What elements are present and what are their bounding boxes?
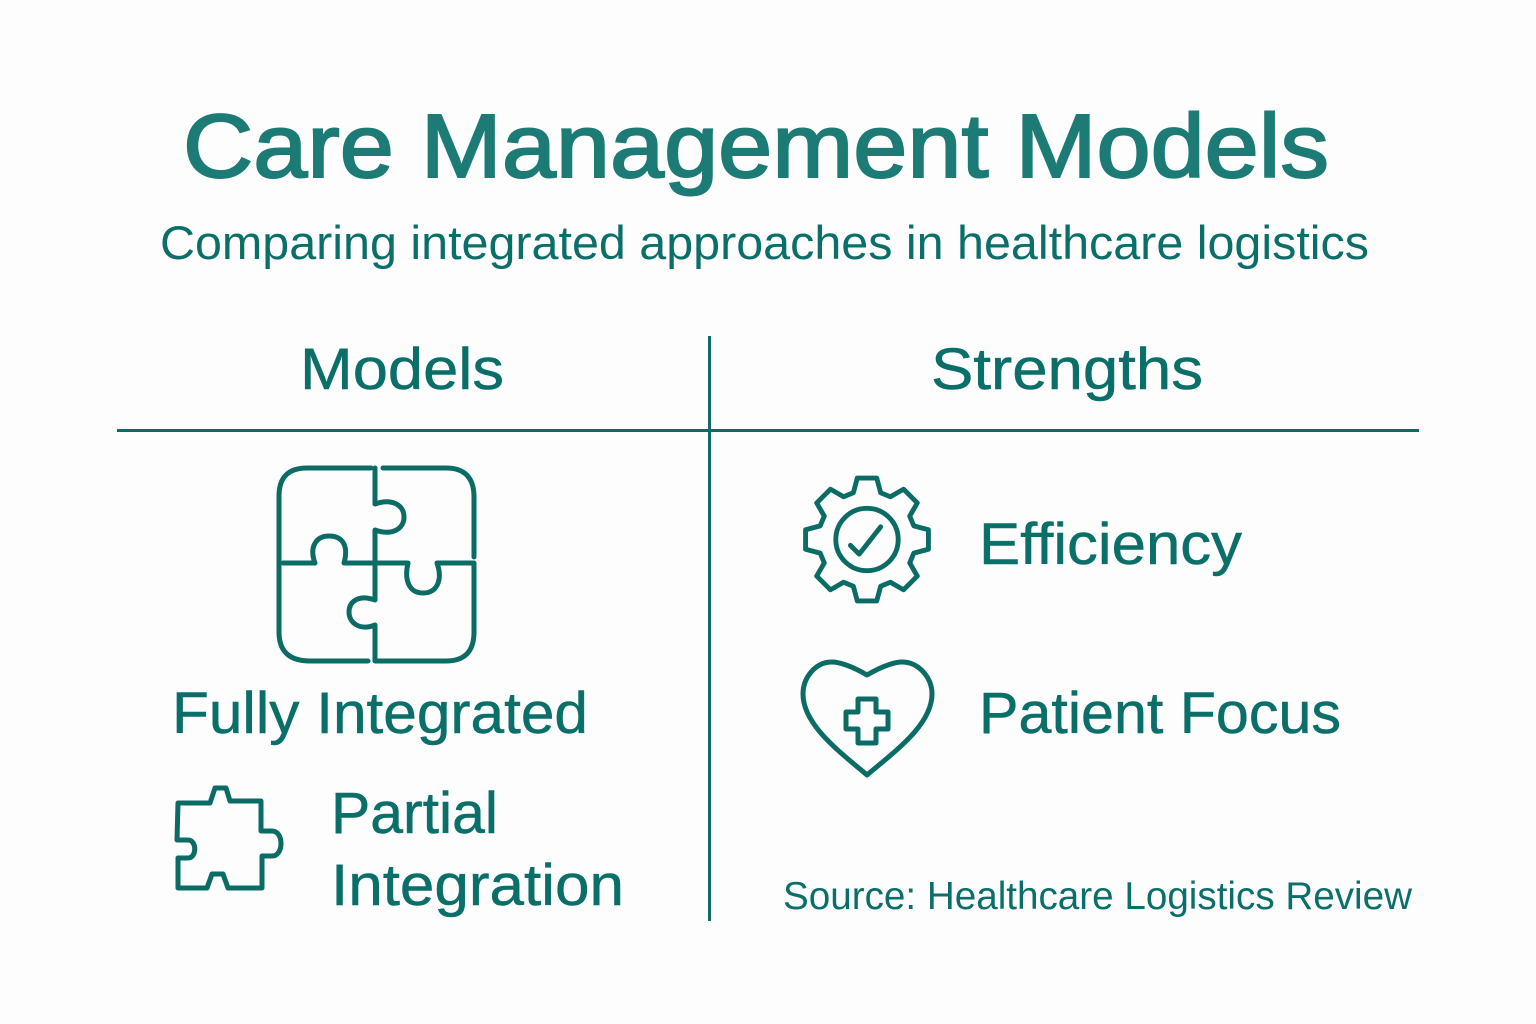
label: partial integration: Partial: [331, 781, 498, 846]
source note: Source: Healthcare Logistics Review: [783, 875, 1413, 918]
icon: partial puzzle piece: [177, 788, 281, 888]
icon: heart with cross: [803, 662, 932, 775]
heading: strengths: Strengths: [931, 337, 1203, 402]
heading: models: Models: [300, 337, 504, 402]
label: patient focus: Patient Focus: [979, 681, 1341, 746]
label: partial integration: [331, 781, 624, 918]
icon: gear with check: [806, 478, 928, 601]
label: fully integrated: Fully Integrated: [172, 681, 588, 746]
panel: strengths: [783, 337, 1413, 918]
title: Care Management Models: [183, 97, 1329, 197]
label: efficiency: Efficiency: [979, 512, 1242, 577]
label: partial integration: Integration: [331, 853, 624, 918]
subtitle: Comparing integrated approaches in healthcare logistics: [160, 216, 1369, 269]
icon: fully integrated puzzle: [279, 468, 474, 661]
panel: models: [172, 337, 624, 918]
